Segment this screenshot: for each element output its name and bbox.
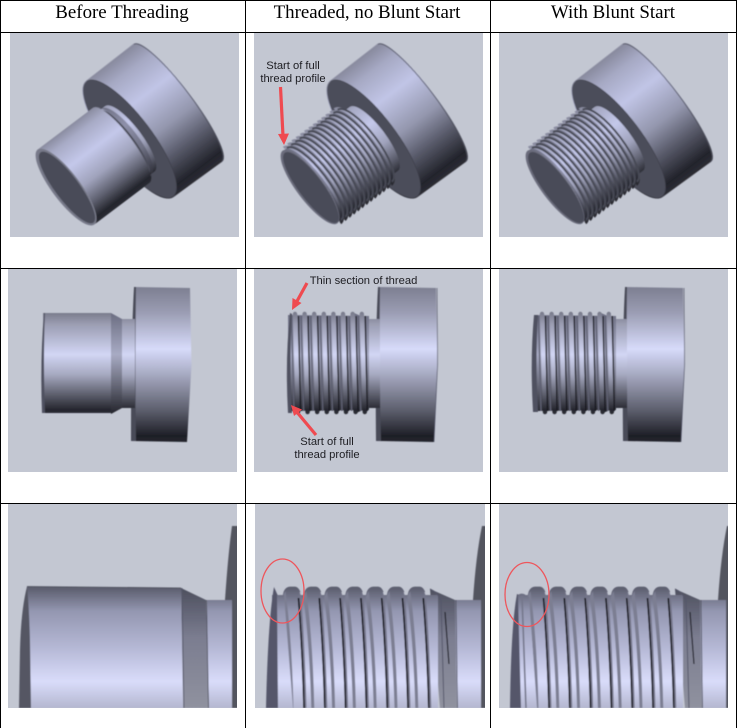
callout: red circle around sharp thread start [261,559,304,623]
panel: threaded no blunt start, close-up [255,504,486,708]
panel: threaded no blunt start, side view [254,269,483,472]
icon: plain part, close-up [19,526,238,708]
icon: blunt start part, side view [532,287,684,442]
annotation: start of full thread profile: Start of full [266,60,320,72]
arrow: start of full thread profile [291,405,316,435]
panel: before threading, isometric view [10,33,239,254]
icon: blunt start threaded part, isometric [525,42,714,225]
arrow: thin section of thread [292,283,307,310]
icon: blunt start part, close-up [510,526,731,708]
arrow: start of full thread profile [278,87,289,145]
panel: before threading, side view [8,269,237,472]
annotation: start of full thread profile: thread profile [260,73,326,85]
panel: with blunt start, isometric view [499,33,728,253]
annotation: start of full thread profile [294,436,360,461]
icon: threaded part, side view [287,287,438,442]
icon: plain machined part, isometric [35,42,225,226]
panel: threaded no blunt start, isometric view [254,33,483,253]
panel: with blunt start, side view [499,269,728,472]
heading: threaded, no blunt start: Threaded, no Blunt Start [274,2,461,23]
heading: with blunt start: With Blunt Start [551,2,676,23]
annotation: start of full thread profile [260,60,326,85]
annotation: thin section of thread: Thin section of thread [310,275,417,287]
icon: threaded part, isometric [280,42,469,225]
icon: plain part, side view [41,287,192,442]
icon: threaded part, close-up [266,526,486,708]
callout: red circle around blunt thread start [505,562,549,626]
panel: before threading, close-up [8,504,238,708]
annotation: start of full thread profile: thread profile [294,449,360,461]
panel: with blunt start, close-up [499,504,731,708]
heading: before threading: Before Threading [55,2,189,23]
annotation: start of full thread profile: Start of full [300,436,354,448]
